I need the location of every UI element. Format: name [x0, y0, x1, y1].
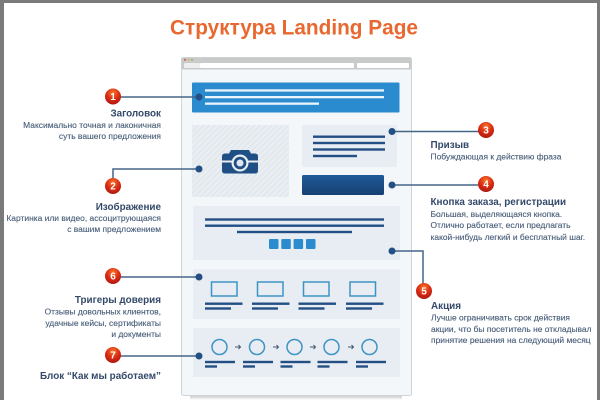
text: call to action — [430, 140, 562, 162]
text: call to action: Побуждающая к действию фраза — [430, 152, 562, 162]
text: trust triggers: Тригеры доверия — [75, 295, 161, 306]
callout 3: call to action — [388, 122, 562, 162]
callout 4: order button — [388, 176, 585, 242]
text: promo: акции, что бы посетитель не откладывал — [431, 324, 592, 334]
browser mockup — [182, 58, 412, 400]
text: headline — [23, 108, 161, 141]
text: promo: Лучше ограничивать срок действия — [431, 312, 570, 322]
badge 7: 7 — [110, 350, 116, 362]
badge 4: 4 — [483, 180, 489, 190]
callout 1: headline — [23, 88, 202, 141]
how we work block — [193, 328, 400, 377]
callout 5: promo — [388, 248, 592, 345]
badge 3 — [478, 122, 494, 138]
badge 5: 5 — [421, 286, 427, 298]
text: promo — [431, 301, 592, 345]
icon: camera — [222, 150, 258, 174]
text: image — [6, 202, 162, 234]
badge 5 — [416, 283, 432, 299]
header block — [192, 82, 400, 112]
image block — [192, 125, 289, 197]
order button — [302, 175, 384, 195]
text: image: Изображение — [96, 202, 162, 213]
text: order button: Большая, выделяющаяся кнопка. — [430, 209, 562, 219]
callout 7: how we work — [40, 347, 202, 382]
text: order button: какой-нибудь легкий и бесплатный шаг. — [430, 232, 585, 242]
text: headline: Заголовок — [110, 108, 161, 120]
text: trust triggers — [45, 295, 161, 339]
text: image: Картинка или видео, ассоцитрующаяся — [6, 213, 161, 223]
text: order button — [430, 197, 585, 242]
text: headline: суть вашего предложения — [59, 131, 161, 141]
trust block — [193, 270, 400, 319]
browser toolbar — [182, 58, 412, 70]
badge 1 — [105, 88, 121, 104]
badge 4 — [478, 176, 494, 192]
badge 1: 1 — [110, 92, 116, 103]
badge 2: 2 — [110, 182, 116, 192]
callout 6: trust triggers — [45, 268, 202, 339]
text: headline: Максимально точная и лаконичная — [23, 120, 161, 130]
badge 2 — [105, 178, 121, 194]
promo block — [193, 206, 400, 260]
text: trust triggers: удачные кейсы, сертификаты — [45, 318, 161, 328]
badge 3: 3 — [483, 126, 489, 136]
badge 6 — [105, 268, 121, 284]
title: Структура Landing Page — [170, 16, 418, 40]
text: image: с вашим предложением — [67, 224, 161, 234]
call to action block — [302, 125, 397, 167]
text: trust triggers: и документы — [111, 329, 161, 339]
text: how we work: Блок “Как мы работаем” — [40, 371, 161, 382]
text: call to action: Призыв — [430, 140, 469, 151]
badge 7 — [105, 347, 121, 363]
badge 6: 6 — [110, 272, 116, 282]
callout 2: image — [6, 166, 202, 234]
text: order button: Кнопка заказа, регистрации — [430, 197, 566, 208]
text: order button: Отлично работает, если предлагать — [430, 220, 571, 230]
text: trust triggers: Отзывы довольных клиентов, — [45, 306, 161, 316]
text: promo: принятие решения на следующий месяц — [431, 335, 591, 345]
text: promo: Акция — [431, 301, 461, 312]
